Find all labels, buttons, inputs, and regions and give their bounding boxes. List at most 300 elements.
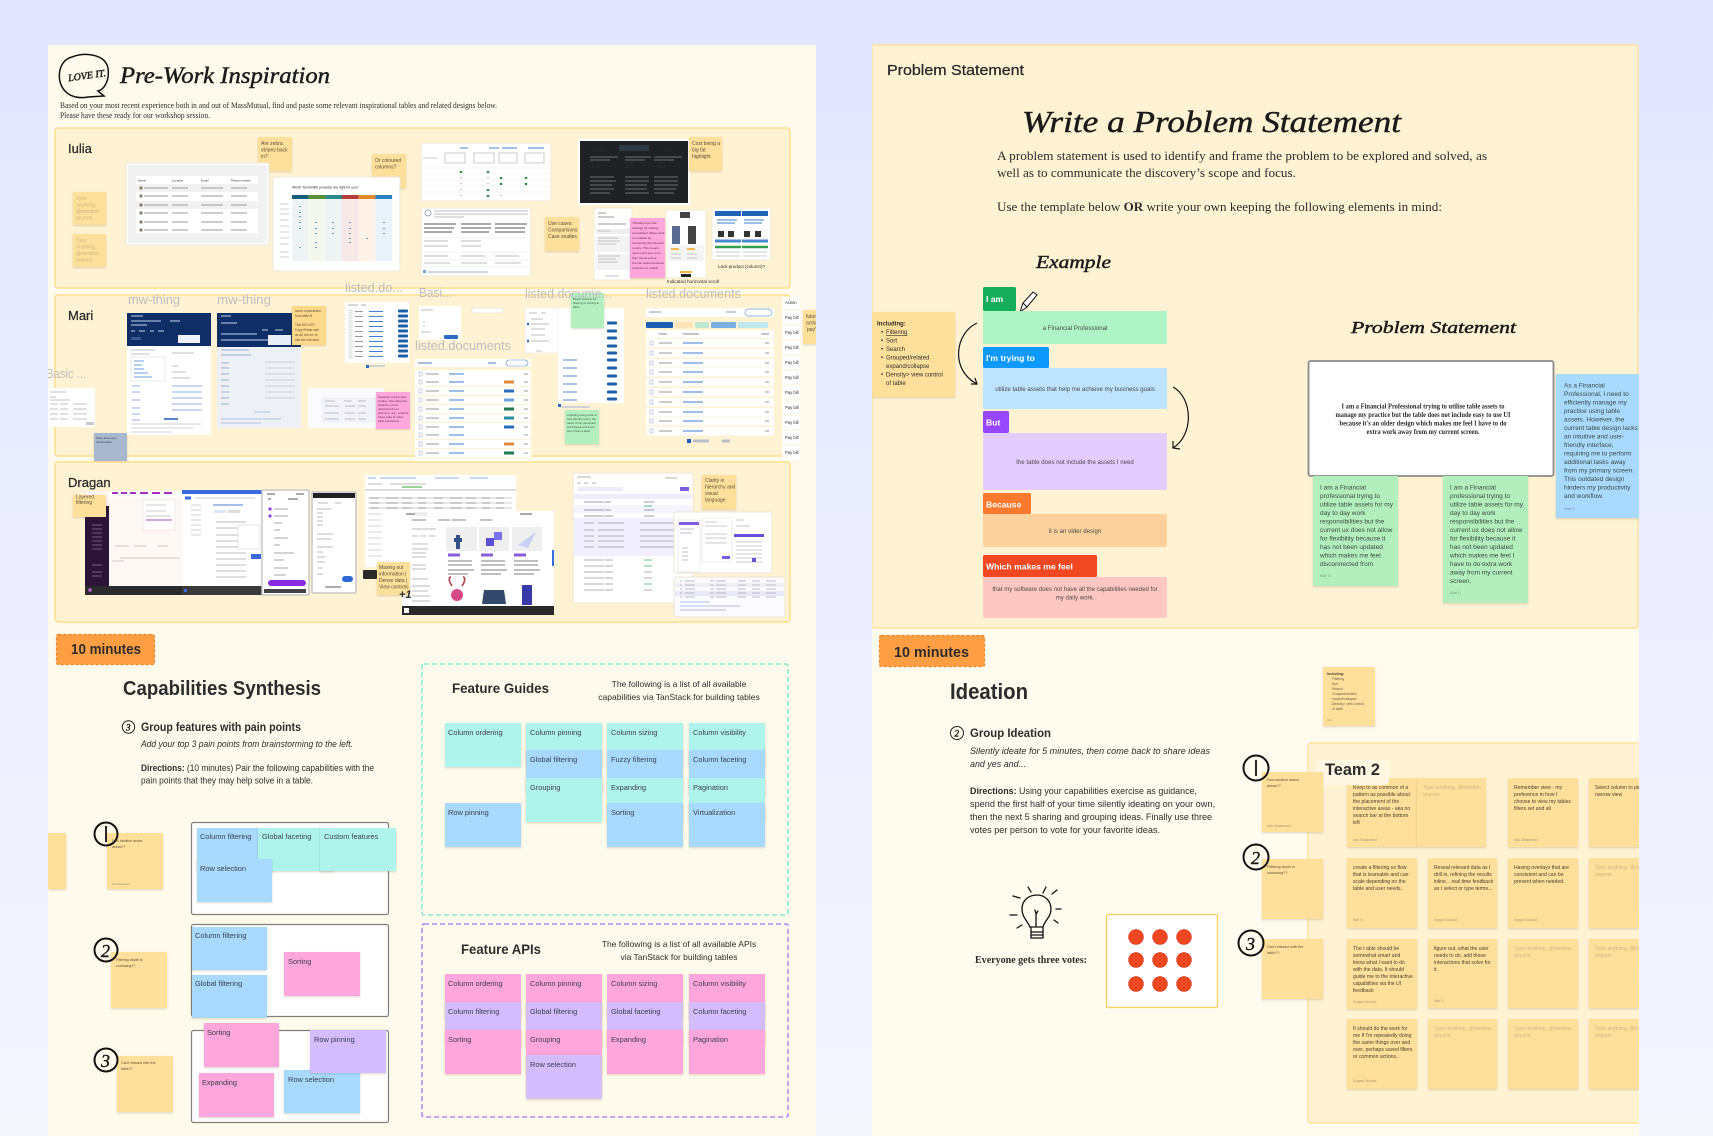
- sticky: column sizing: Column sizing: [611, 979, 657, 988]
- sticky: including list: Filtering: [886, 330, 907, 336]
- sticky: green statement two: away from my current: [1450, 570, 1513, 576]
- sticky: including list: Search: [886, 347, 905, 353]
- sticky: big fat highlight: highlight: [692, 154, 711, 160]
- sticky: green note top: filtering or sorting in: [573, 301, 600, 305]
- sticky: green statement two: screen.: [1450, 578, 1472, 585]
- screenshot: basic modal: [419, 306, 503, 340]
- sticky: row 2 col 2: Reveal relevant data as I: [1434, 865, 1490, 871]
- sticky: sorting: Sorting: [448, 1035, 471, 1044]
- sticky: blue statement: current table design lacks: [1564, 425, 1638, 432]
- sticky: row 4 col 4: Type anything, @mention: [1595, 1026, 1653, 1032]
- sticky: global faceting: [258, 828, 334, 871]
- sticky: row 1 col 3: Remember view - my: [1514, 785, 1563, 791]
- badge: 10 minutes left: [56, 634, 154, 664]
- sticky: explorations: [292, 306, 326, 345]
- screenshot: mobbin gallery: [402, 511, 554, 615]
- sticky: pink note: to tabs. This means: [632, 246, 659, 250]
- sticky: column faceting: Column faceting: [693, 755, 746, 764]
- sticky: row 4 col 1: Dragan Dzulovic: [1353, 1079, 1377, 1083]
- sticky: grouping: [526, 778, 602, 822]
- sticky: explorations: see the real deal: [295, 338, 319, 342]
- sticky: row 4 col 3: anyone: [1514, 1033, 1531, 1039]
- label: Basic: Basic ...: [46, 366, 86, 381]
- sticky: global faceting: Global faceting: [611, 1007, 660, 1016]
- tag: which makes me feel: [983, 555, 1097, 577]
- sticky: row 2 col 1: table and user needs.: [1353, 886, 1402, 892]
- screenshot: dark pricing cards: PRO: [665, 149, 672, 153]
- sticky: green statement two: I am a Financial: [1450, 484, 1496, 492]
- icon: number 3: [94, 1048, 118, 1072]
- sticky: row 1 col 3: preference in how I: [1514, 792, 1557, 798]
- sticky: row pinning: [310, 1030, 386, 1073]
- heading: feature guides: Feature Guides: [452, 680, 549, 696]
- sticky: row 3 col 1: feedback: [1353, 988, 1374, 994]
- group 1: non-intuitive areas: [94, 822, 396, 914]
- sticky: row 4 col 1: or common actions..: [1353, 1054, 1399, 1060]
- screenshot: comparison grid: [421, 143, 551, 201]
- sticky: green statement one: [1313, 476, 1398, 586]
- sticky: maxing out information: View controls: [379, 584, 409, 590]
- sticky: green statement one: responsibilities but the: [1320, 518, 1385, 526]
- sticky: including small: Search: [1332, 687, 1343, 691]
- sticky: column filtering: [445, 1002, 521, 1046]
- box: problem statement answer: extra work away from my current screen.: [1366, 427, 1480, 436]
- sticky: row 3 col 4: [1589, 939, 1659, 1008]
- sticky: pink note: comparison tables work: [632, 231, 665, 235]
- screenshot: compact table: [674, 577, 785, 617]
- sticky: including list: of table: [886, 381, 906, 387]
- sticky: including small: Mari: [1327, 718, 1332, 722]
- sticky: expanding: Expanding: [611, 1035, 646, 1044]
- icon: number 2: 2: [101, 941, 110, 961]
- sticky: blue statement: requiring me to perform: [1564, 450, 1632, 458]
- panel: team 2: [1308, 743, 1659, 1123]
- sticky: grey-blue note: [94, 433, 127, 462]
- sticky: pink note: [630, 218, 665, 278]
- sticky: grey-blue note: Save and every: [96, 436, 117, 440]
- sticky: placeholder two: Type: [76, 238, 87, 244]
- sticky: can't interact: table??: [121, 1067, 133, 1071]
- sticky: row selection: [526, 1055, 602, 1099]
- sticky: filtering depth pain point: Filtering depth is: [1267, 865, 1295, 869]
- label: mw-thing one: mw-thing: [128, 292, 180, 307]
- screenshot: action column: Pay bill: [785, 450, 799, 455]
- sticky: green statement two: responsibilities but the: [1450, 518, 1515, 526]
- sticky: maxing out information: information |: [379, 572, 406, 578]
- description: via TanStack for building tables: [620, 952, 738, 962]
- tag: but: But: [986, 418, 1000, 428]
- sticky: including list: •: [881, 330, 883, 336]
- sticky: green note top: [571, 293, 604, 328]
- icon: team number 1: [1244, 756, 1268, 780]
- sticky: row 2 col 3: consistent and can be: [1514, 872, 1564, 878]
- heading: feature APIs: Feature APIs: [461, 941, 541, 957]
- box: table does not include: [983, 433, 1167, 490]
- sticky: filtering depth: confusing??: [116, 964, 135, 968]
- sticky: non-intuitive pain point: Non-intuitive active: [1267, 778, 1299, 782]
- directions: [970, 786, 1215, 836]
- icon: step 2: [950, 726, 964, 740]
- sticky: blue statement: hinders my productivity: [1564, 484, 1631, 492]
- sticky: clarity: [702, 475, 736, 509]
- sticky: column visibility: [689, 723, 765, 767]
- sticky: row 3 col 1: capabilities via the UI: [1353, 981, 1401, 987]
- sticky: global filtering: Global filtering: [530, 1007, 577, 1016]
- sticky: row 1 col 1: search bar at the bottom: [1353, 813, 1408, 819]
- heading: capabilities synthesis: Capabilities Synthesis: [123, 678, 321, 700]
- sticky: row 1 col 3: choose to view my tables: [1514, 799, 1571, 805]
- icon: pencil: [1020, 292, 1037, 312]
- sticky: expanding: [607, 778, 683, 822]
- sticky: blue statement: practice using table: [1564, 408, 1620, 415]
- box: utilize table assets: [983, 368, 1167, 409]
- sticky: clarity: Clarity in: [705, 478, 725, 484]
- sticky: global filtering: [526, 750, 602, 794]
- subheading: Group features with pain points: [141, 722, 301, 734]
- sticky: use cases: Comparisons: [548, 228, 578, 234]
- sticky: custom features: [320, 828, 396, 871]
- screenshot: people table: Name: [138, 178, 146, 182]
- box: table does not include: the table does not include the assets I need: [1016, 459, 1134, 466]
- sticky: row 3 col 1: with the data, It should: [1353, 967, 1404, 973]
- sticky: row 1 col 2: Type anything, @mention: [1423, 785, 1481, 791]
- label: lack product column: Lack product (column)?: [718, 264, 765, 269]
- sticky: global faceting: Global faceting: [262, 832, 311, 841]
- screenshot: dense data table: [365, 475, 516, 567]
- sticky: placeholder one: @mention: [76, 209, 99, 215]
- screenshot: documents with filter pills: [646, 308, 774, 443]
- sticky: explorations: as all, dm me to: [295, 333, 318, 337]
- sticky: row 4 col 1: It should do the work for: [1353, 1026, 1408, 1032]
- sticky: row pinning: Row pinning: [448, 808, 489, 817]
- tag: I am: I am: [986, 294, 1004, 304]
- sticky: sorting: Sorting: [207, 1028, 230, 1037]
- screenshot: product comparison column: [712, 208, 771, 260]
- sticky: column pinning: [526, 723, 602, 767]
- sticky: placeholder one: anyone: [76, 216, 93, 222]
- box: older design: it is an older design: [1049, 528, 1101, 535]
- screenshot: dark pricing cards: 45: [656, 160, 666, 170]
- sticky: row 4 col 4: anyone: [1595, 1033, 1612, 1039]
- sticky: including small: [1323, 667, 1375, 726]
- label: mw-thing two: mw-thing: [217, 292, 271, 307]
- sticky: row 4 col 2: Type anything, @mention: [1434, 1026, 1492, 1032]
- panel: feature APIs: [422, 924, 788, 1117]
- block: group features directions: [122, 721, 374, 786]
- sticky: column filtering: [197, 828, 273, 871]
- sticky: pink note: products on mobile.: [632, 266, 659, 270]
- sticky: row 3 col 2: interactions that solve for: [1434, 960, 1491, 966]
- sticky: pink note: but can switch between: [632, 261, 664, 265]
- sticky: placeholder one: anything,: [76, 202, 96, 208]
- sticky: green statement one: professional trying to: [1320, 493, 1380, 500]
- sticky: row 2 col 1: scale depending on the: [1353, 879, 1406, 885]
- icon: step 3: 3: [125, 722, 131, 732]
- tag: because: [983, 493, 1031, 514]
- box: problem statement answer: [1308, 361, 1554, 476]
- screenshot: plan comparison: [421, 208, 531, 276]
- sticky: including small: expand/collapse: [1332, 697, 1357, 701]
- sticky: use cases: [545, 217, 579, 251]
- icon: team number 2: 2: [1251, 848, 1260, 868]
- screenshot: action column: Pay bill: [785, 345, 799, 350]
- directions: spend the first half of your time silently ideating on your own,: [970, 799, 1215, 810]
- sticky: row 3 col 1: somewhat smart and: [1353, 953, 1400, 959]
- sticky: sorting: Sorting: [611, 808, 634, 817]
- sticky: virtualization: [689, 803, 765, 847]
- sticky: row 2 col 4: Type anything, @mention: [1595, 865, 1653, 871]
- intro paragraphs: [997, 148, 1487, 214]
- sticky: row 2 col 2: [1428, 858, 1497, 928]
- sticky: placeholder one: [73, 192, 106, 225]
- sticky: row 1 col 3: filters set and all: [1514, 806, 1551, 812]
- screenshot: dark pricing cards: 28: [625, 160, 635, 170]
- box: my software: my daily work.: [1056, 594, 1095, 602]
- arrow: right curve: [1173, 387, 1188, 449]
- sticky: pink feedback: hierarchy of row: [378, 403, 399, 407]
- screenshot: mobbin gallery: Mobbin: [532, 608, 547, 613]
- sticky: green statement two: utilize table assets for my: [1450, 502, 1524, 508]
- sticky: green note bottom: won't have a label: [567, 429, 590, 433]
- sticky: column pinning: Column pinning: [530, 979, 581, 988]
- sticky: column filtering: [192, 927, 267, 970]
- sticky: pink feedback: would like to be a clear: [378, 395, 407, 399]
- sticky: future action: future: [806, 314, 819, 320]
- screenshot: action column: Action: [785, 300, 797, 305]
- sticky: row 2 col 2: Dragan Dzulovic: [1434, 918, 1458, 922]
- sticky: including list: [872, 312, 955, 397]
- sticky: including small: Including:: [1327, 672, 1344, 676]
- sticky: blue statement: friendly interface,: [1564, 442, 1614, 449]
- panel: problem statement: [872, 45, 1639, 628]
- sticky: row 3 col 3: Type anything, @mention: [1514, 946, 1572, 952]
- sticky: row 4 col 1: over, perhaps saved filters: [1353, 1047, 1413, 1053]
- directions: votes per person to vote for your favorite ideas.: [970, 825, 1160, 836]
- sticky: pink feedback: table interactions: [378, 419, 400, 423]
- sticky: row 2 col 3: Having overlays that are: [1514, 865, 1569, 871]
- sticky: row 4 col 2: anyone: [1434, 1033, 1451, 1039]
- sticky: including small: Grouped/related: [1332, 692, 1357, 696]
- screenshot: navy dashboard one: [127, 313, 211, 435]
- screenshot: TechSmith comparison: Which TechSmith products are right for you?: [292, 186, 359, 190]
- sticky: non-intuitive: Non-intuitive active: [112, 839, 142, 843]
- sticky: grouping: Grouping: [530, 783, 560, 792]
- sticky: zebra stripes: in?: [261, 154, 268, 160]
- sticky: blue statement: Professional, I need to: [1564, 391, 1629, 398]
- sticky: filtering depth: [111, 952, 167, 1008]
- tag: I'm trying to: [983, 347, 1049, 368]
- sticky: including list: Grouped/related: [886, 356, 929, 362]
- intro text: [60, 102, 496, 120]
- sticky: placeholder two: anyone: [76, 258, 93, 264]
- sticky: explorations: some explorations: [295, 309, 321, 313]
- sticky: pagination: Pagination: [693, 783, 728, 792]
- sticky: row 4 col 1: the same things over and: [1353, 1040, 1410, 1046]
- sticky: including list: expand/collapse: [886, 364, 930, 370]
- badge: 10 minutes left: 10 minutes: [71, 642, 141, 658]
- label: listed.docume: listed.docume...: [525, 286, 612, 301]
- screenshot: action column: Pay bill: [785, 420, 799, 425]
- sticky: non-intuitive: [107, 833, 163, 889]
- icon: love it speech bubble: LOVE IT.: [66, 68, 107, 84]
- sticky: row 3 col 4: Type anything, @mention: [1595, 946, 1653, 952]
- sticky: green note bottom: help identify a doc, the: [567, 417, 596, 421]
- sticky: custom features: Custom features: [324, 832, 379, 841]
- heading: Mari: Mari: [68, 308, 93, 323]
- sticky: sorting: Sorting: [288, 957, 311, 966]
- sticky: green note top: table: [573, 305, 580, 309]
- description: [598, 679, 760, 702]
- sticky: pink note: converting the columns: [632, 241, 664, 245]
- sticky: blue statement: additional tasks away: [1564, 459, 1627, 466]
- screenshot: dark pricing cards: 13: [590, 160, 600, 170]
- sticky: blue statement: As a Financial: [1564, 382, 1605, 390]
- intro text: Based on your most recent experience both in and out of MassMutual, find and paste some relevant inspirational tables and related designs below.: [60, 100, 497, 110]
- label: plus one: +1: [399, 589, 412, 601]
- sticky: sorting: [284, 952, 360, 996]
- sticky: including list: •: [881, 356, 883, 362]
- sticky: green note bottom: [565, 410, 599, 444]
- sticky: can't interact: [117, 1056, 173, 1112]
- screenshot: action column: Pay bill: [785, 435, 799, 440]
- sticky: virtualization: Virtualization: [693, 808, 735, 817]
- intro paragraphs: Use the template below OR write your own keeping the following elements in mind:: [997, 199, 1442, 214]
- sticky: placeholder two: anything,: [76, 244, 96, 250]
- screenshot: product comparison with scroll: [666, 210, 706, 278]
- sticky: pink feedback: actions or use - could be: [378, 411, 409, 415]
- sticky: row 1 col 3: Iulia Stratanenco: [1514, 838, 1538, 842]
- screenshot: phone filter: [594, 208, 632, 280]
- sticky: global filtering: Global filtering: [530, 755, 577, 764]
- sticky: row 1 col 1: Keep to as common of a: [1353, 785, 1408, 791]
- sticky: row 2 col 4: [1589, 858, 1659, 928]
- sticky: including list: Density> view control: [886, 372, 943, 378]
- sticky: blue statement: an intuitive and user-: [1564, 434, 1624, 440]
- sticky: row selection: Row selection: [200, 864, 246, 873]
- description: capabilities via TanStack for building tables: [598, 692, 760, 702]
- sticky: including list: Sort: [886, 338, 897, 344]
- sticky: sorting: [204, 1023, 279, 1067]
- panel: problem statement and ideation: [872, 45, 1659, 1136]
- screenshot: filter and date picker: [674, 512, 772, 573]
- sticky: expanding: Expanding: [611, 783, 646, 792]
- sticky: explorations: Copy+Paste well: [295, 328, 319, 332]
- sticky: green statement two: which makes me feel I: [1449, 552, 1514, 560]
- sticky: global filtering: [192, 975, 267, 1018]
- screenshot: listed documents column: [345, 302, 409, 368]
- sticky: green statement two: professional trying to: [1450, 493, 1510, 500]
- sticky: row selection: Row selection: [530, 1060, 576, 1069]
- sticky: coloured columns: columns?: [375, 164, 397, 170]
- sticky: row 2 col 1: that is learnable and can: [1353, 872, 1409, 878]
- sticky: expanding: Expanding: [202, 1078, 237, 1087]
- tag: which makes me feel: Which makes me feel: [986, 562, 1073, 572]
- sticky: pagination: [689, 778, 765, 822]
- panel: Mari: [46, 280, 837, 462]
- icon: love it speech bubble: [59, 55, 108, 98]
- sticky: row 3 col 1: Dragan Dzulovic: [1353, 1000, 1377, 1004]
- directions: Directions: (10 minutes) Pair the following capabilities with the: [141, 763, 374, 773]
- screenshot: form card: [48, 388, 95, 427]
- sticky: row 1 col 2: [1417, 778, 1486, 847]
- sticky: row 4 col 4: [1589, 1019, 1659, 1089]
- sticky: green statement two: day to day work: [1450, 510, 1496, 517]
- box: older design: [983, 514, 1167, 547]
- screenshot: phone categories: [262, 490, 309, 595]
- block: group ideation: [950, 726, 1215, 836]
- screenshot: documents table: [415, 359, 531, 462]
- label: everyone gets three votes: Everyone gets three votes:: [975, 955, 1087, 966]
- screenshot: mobbin gallery: curated by: [512, 609, 528, 613]
- sticky: can't interact pain point: Can't interact with the: [1267, 945, 1303, 949]
- sticky: sorting: [607, 803, 683, 847]
- sticky: green statement one: disconnected from: [1320, 561, 1373, 568]
- sticky: including list: •: [881, 338, 883, 344]
- tab: team 2 heading: Team 2: [1325, 761, 1380, 779]
- title: pre-work inspiration: Pre-Work Inspiration: [119, 63, 330, 88]
- sticky: layered filtering: [73, 494, 106, 517]
- screenshot: action column: Pay bill: [785, 375, 799, 380]
- screenshot: phone filters: [312, 492, 356, 593]
- box: group one: [192, 822, 388, 914]
- description: [602, 939, 756, 962]
- sticky: blue statement: assets. However, the: [1564, 416, 1625, 424]
- sticky: row 2 col 2: as I select or type terms...: [1434, 886, 1492, 892]
- sticky: clarity: visual: [705, 491, 718, 497]
- sticky: green statement one: for flexibility because it: [1320, 536, 1386, 542]
- sticky: row 1 col 4: Select column to pin: [1595, 785, 1641, 791]
- tag: I'm trying to: I'm trying to: [986, 353, 1035, 363]
- sticky: green statement one: Mari G: [1320, 574, 1331, 578]
- sticky: column filtering: Column filtering: [448, 1007, 499, 1016]
- heading: problem statement example: Problem Statement: [1350, 318, 1518, 337]
- screenshot: dark pricing cards: PORTFOLIO: [625, 149, 643, 153]
- screenshot: TechSmith comparison: [273, 177, 400, 271]
- description: The following is a list of all available APIs: [602, 939, 756, 949]
- sticky: row 1 col 1: interactive areas - aka no: [1353, 806, 1410, 812]
- sticky: row 3 col 2: needs to do, add those: [1434, 953, 1486, 959]
- heading: ideation: Ideation: [950, 679, 1028, 704]
- screenshot: navy dashboard two: [217, 313, 301, 428]
- sticky: row 3 col 3: anyone: [1514, 953, 1531, 959]
- sticky: row pinning: Row pinning: [314, 1035, 355, 1044]
- icon: small dark tile: [363, 570, 377, 579]
- sticky: including small: Filtering: [1332, 677, 1344, 681]
- sticky: clarity: language.: [705, 498, 727, 504]
- directions: [141, 763, 374, 786]
- sticky: row 3 col 4: anyone: [1595, 953, 1612, 959]
- icon: number 2: [94, 938, 118, 962]
- sticky: blue statement: and workflow.: [1564, 493, 1604, 500]
- sticky: column sizing: [607, 974, 683, 1018]
- box: a financial professional: a Financial Professional: [1043, 325, 1107, 332]
- screenshot: action column: [782, 297, 800, 460]
- sticky: row 4 col 2: [1428, 1019, 1497, 1089]
- sticky: green statement two: current ux does not allow: [1450, 527, 1523, 534]
- sticky: blue statement: efficiently manage my: [1564, 400, 1627, 406]
- panel: Iulia: [55, 128, 790, 288]
- icon: team number 3: 3: [1245, 934, 1255, 954]
- sticky: column faceting: [689, 1002, 765, 1046]
- tab: team 2 heading: [1316, 760, 1389, 785]
- screenshot: dark pricing cards: [578, 139, 690, 205]
- sticky: green note top: Better solution for: [573, 297, 597, 301]
- sticky: including small: of table: [1332, 707, 1343, 711]
- box: group two: [192, 924, 388, 1016]
- sticky: big fat highlight: Cost being a: [692, 141, 720, 147]
- icon: number 1: [94, 822, 118, 846]
- screenshot: people table: Phone number: [231, 178, 251, 182]
